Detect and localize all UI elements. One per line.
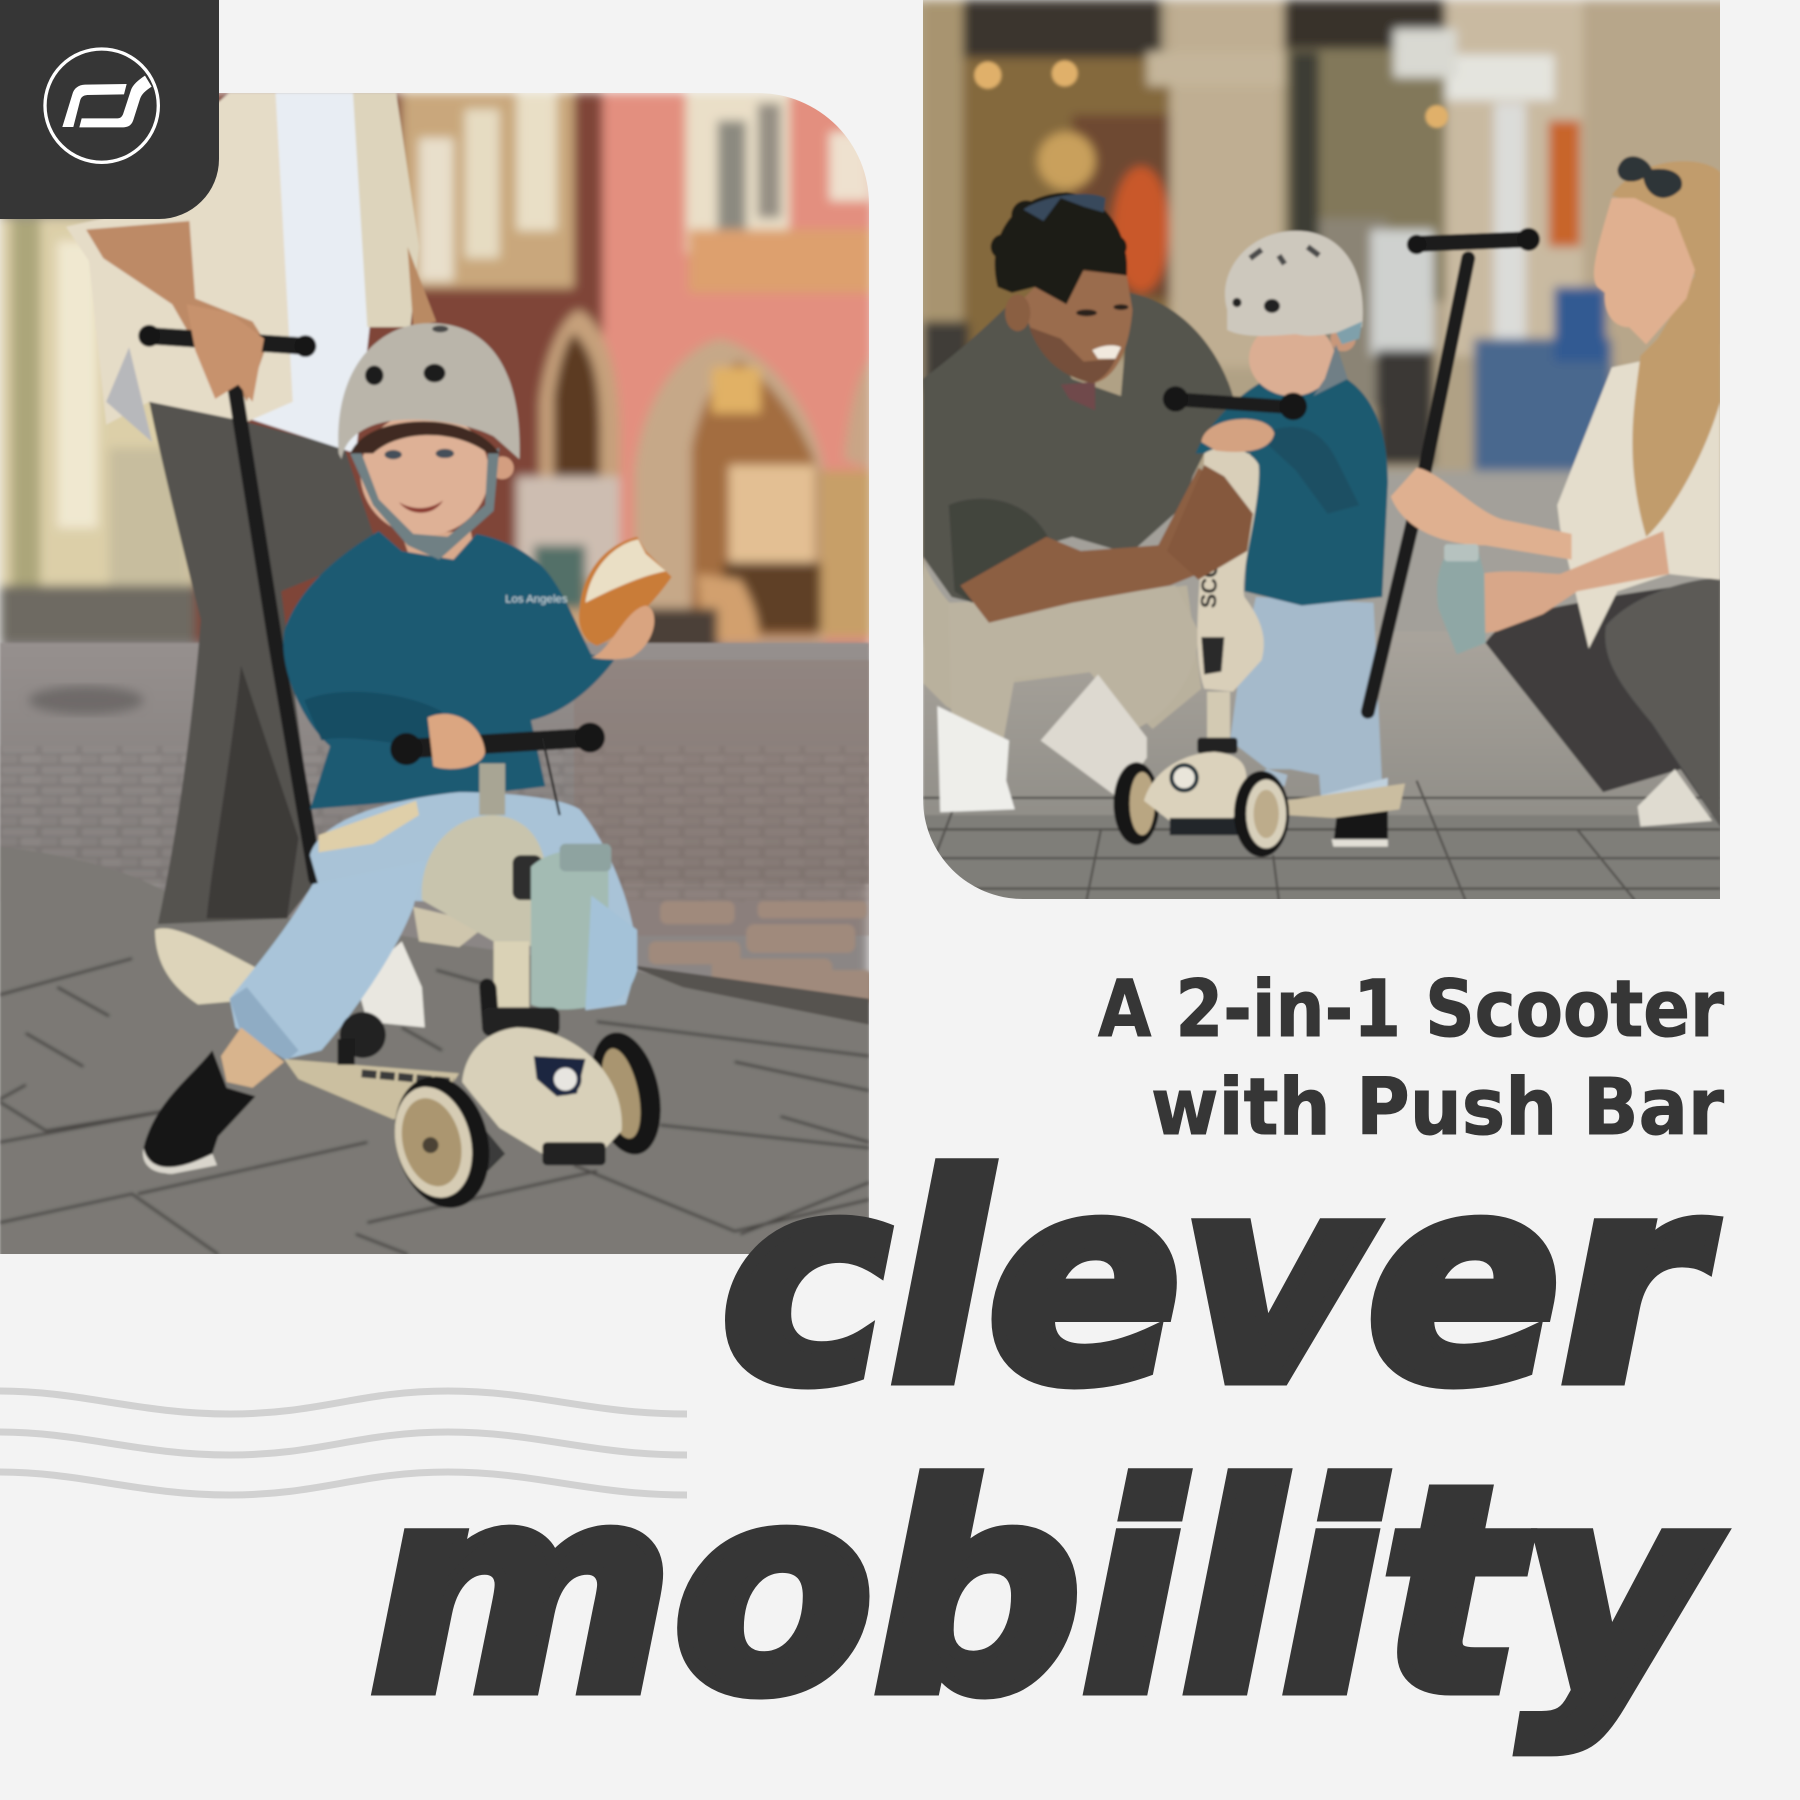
logo badge (0, 0, 219, 219)
push bar (1368, 239, 1529, 712)
cobbled street (0, 643, 869, 884)
push bar (149, 336, 316, 878)
decorative wave lines (0, 1391, 687, 1495)
woman (1391, 156, 1720, 827)
scooter neck and handlebar (1163, 386, 1307, 754)
panel: photo of child riding scooter with adult pushing (0, 93, 872, 1258)
adult hand on bar (187, 304, 264, 402)
child (1196, 231, 1388, 847)
title: clever mobility: clever (721, 1117, 1716, 1446)
bread (579, 537, 672, 646)
subtitle (1098, 965, 1724, 1153)
scooter neck and handlebar: SCOOT (1196, 530, 1223, 609)
subtitle: with Push Bar (1151, 1063, 1724, 1153)
pavement (923, 637, 1720, 816)
foreground pavers (0, 847, 869, 1257)
title: clever mobility: mobility (370, 1427, 1720, 1756)
child: Los Angeles (505, 594, 568, 606)
scooter (284, 714, 671, 1218)
background buildings (0, 93, 872, 1258)
title: clever mobility (370, 1117, 1720, 1756)
foreground cobbles (649, 901, 872, 1004)
child (143, 323, 672, 1174)
subtitle: A 2-in-1 Scooter (1098, 965, 1724, 1055)
panel: photo of parents kneeling with child and scooter (900, 0, 1750, 907)
icon: brand logo (45, 49, 158, 162)
blurred street background (900, 0, 1750, 643)
scooter base (1114, 752, 1405, 857)
adult (66, 93, 488, 1027)
man (923, 192, 1253, 812)
